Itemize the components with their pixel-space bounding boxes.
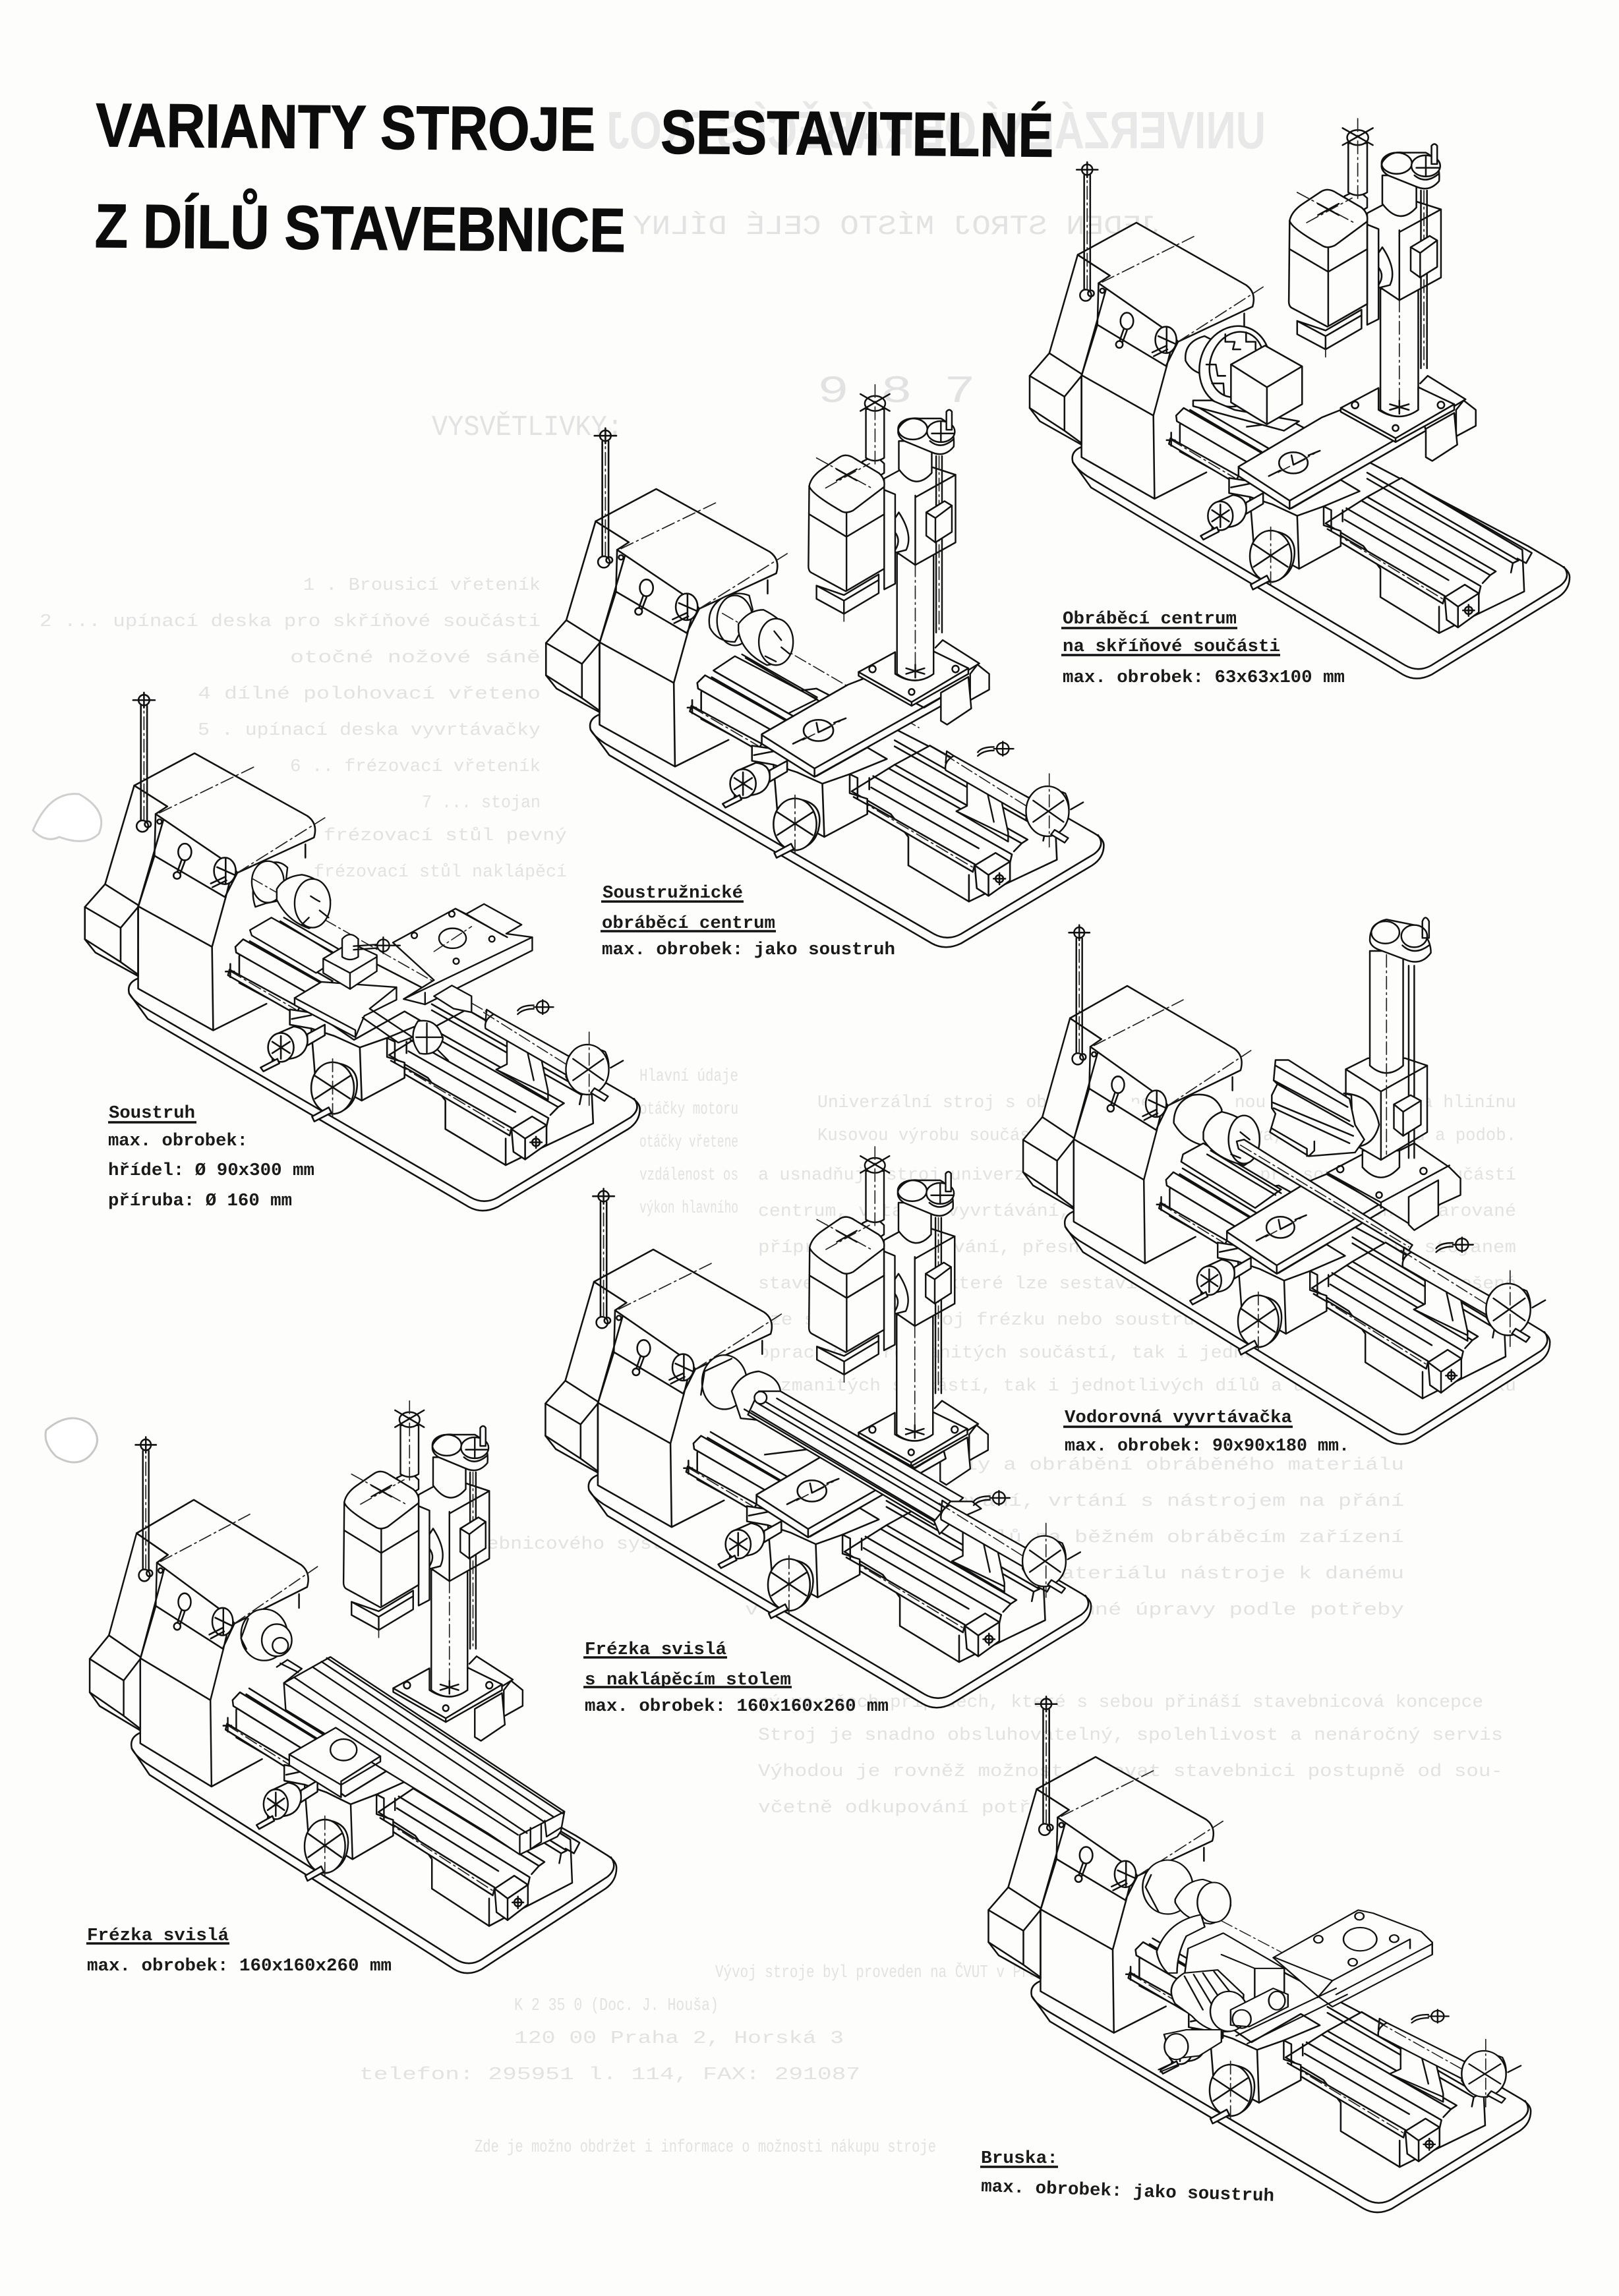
faint show-through text from the reverse page: Hlavní údaje <box>639 1067 738 1087</box>
label: Bruska <box>980 2149 1274 2207</box>
label: Frézka svislá s naklápěcím stolem: s naklápěcím stolem <box>585 1671 791 1690</box>
label: Soustruh: příruba: Ø 160 mm <box>108 1191 292 1211</box>
label: Vodorovná vyvrtávačka: Vodorovná vyvrtávačka <box>1065 1408 1292 1428</box>
machine: Soustružnické obráběcí centrum <box>546 385 1104 947</box>
title: SESTAVITELNÉ <box>661 97 1054 170</box>
faint show-through text from the reverse page: stavebnice dílů, které lze sestavit podle potřeby i kompletně řešené <box>758 1274 1516 1294</box>
faint show-through text from the reverse page: 1 . Brousicí vřeteník <box>303 576 541 596</box>
faint show-through text from the reverse page: K 2 35 0 (Doc. J. Houša) <box>514 1996 719 2016</box>
faint show-through text from the reverse page: 4 dílné polohovací vřeteno <box>198 685 541 704</box>
faint show-through text from the reverse page: Výhodou je rovněž možnost budovat stavebnici postupně od sou- <box>758 1762 1503 1782</box>
label: Obráběcí centrum: na skříňové součásti <box>1063 637 1280 657</box>
faint show-through text from the reverse page: všech důležitých dílů na běžném obráběcím zařízení <box>745 1528 1404 1548</box>
label: Frézka svislá s naklápěcím stolem: max. obrobek: 160x160x260 mm <box>585 1697 889 1717</box>
faint show-through text from the reverse page: 9 8 7 <box>817 371 976 414</box>
label: Bruska: max. obrobek: jako soustruh <box>981 2177 1274 2207</box>
faint show-through text from the reverse page: vzdálenost os <box>639 1166 738 1186</box>
faint show-through text from the reverse page: rozmanitých součástí, tak i jednotlivých dílů a univerzálních vrtáků <box>758 1376 1516 1396</box>
label: Obráběcí centrum <box>1061 610 1345 688</box>
machine: Frézka svislá <box>90 1401 616 1973</box>
faint show-through text from the reverse page: Stroj je snadno obsluhovatelný, spolehlivost a nenáročný servis <box>758 1726 1503 1746</box>
faint show-through text from the reverse page: přípravky, polohování, přesně tvarované dráhy stejně dílů stojanem <box>758 1238 1516 1258</box>
label: Soustružnické obráběcí centrum <box>601 884 895 960</box>
machine: Obráběcí centrum na skříňové součásti <box>1030 119 1570 679</box>
faint show-through text from the reverse page: otáčky vřetene <box>639 1133 738 1153</box>
label: Frézka svislá: max. obrobek: 160x160x260 mm <box>87 1957 392 1976</box>
faint show-through text from the reverse page: 2 ... upínací deska pro skříňové součásti <box>40 612 541 632</box>
faint show-through text from the reverse page: telefon: 295951 l. 114, FAX: 291087 <box>359 2065 860 2085</box>
label: Soustruh: max. obrobek: <box>108 1132 248 1151</box>
faint show-through text from the reverse page: 7 ... stojan <box>422 793 541 813</box>
title: VARIANTY STROJE <box>96 90 596 164</box>
machine: Frézka svislá s naklápěcím stolem <box>545 1147 1091 1708</box>
faint show-through text from the reverse page: ný ve všech případech, které s sebou přináší stavebnicová koncepce <box>758 1693 1483 1713</box>
faint show-through text from the reverse page: a usnadňuje stroj univerzální obráběcí centrum pro soustružení součástí <box>758 1166 1516 1186</box>
faint show-through text from the reverse page: součásti, materiály a obrábění obráběného materiálu <box>745 1456 1404 1476</box>
machine: Vodorovná vyvrtávačka <box>1023 917 1550 1444</box>
faint show-through text from the reverse page: Univerzální stroj s obrovanou nebo obdobnou součástí hovů a hlinínu <box>817 1093 1516 1113</box>
faint show-through text from the reverse page: lze sestavit stroj frézku nebo soustruh s přesnou stavebnicí a pro <box>758 1311 1516 1331</box>
title <box>94 90 1054 269</box>
faint show-through text from the reverse page: Kusovou výrobu součástí z kovů, plastů, dřeva, hovů, hlinínu a podob. <box>817 1126 1516 1146</box>
faint show-through text from the reverse page: výkon hlavního <box>639 1199 738 1219</box>
title: Z DÍLŮ STAVEBNICE <box>94 187 626 265</box>
label: Soustružnické obráběcí centrum: max. obrobek: jako soustruh <box>602 940 895 960</box>
label: Obráběcí centrum: max. obrobek: 63x63x100 mm <box>1063 668 1345 688</box>
machine: Bruska (grinder) <box>988 1696 1531 2212</box>
faint show-through text from the reverse page: otočné nožové sáně <box>290 648 541 668</box>
faint show-through text from the reverse page: 8 ... frézovací stůl pevný <box>250 826 567 846</box>
label: Frézka svislá s naklápěcím stolem <box>583 1640 889 1717</box>
label: Obráběcí centrum: Obráběcí centrum <box>1063 610 1237 629</box>
label: Soustružnické obráběcí centrum: Soustružnické <box>603 884 743 904</box>
label: Soustruh <box>108 1104 314 1211</box>
label: Frézka svislá: Frézka svislá <box>87 1926 229 1946</box>
faint show-through text from the reverse page: centrum, vrtání, vyvrtávání, frézování a polohování přesně tvarované <box>758 1202 1516 1222</box>
machine: Soustruh (lathe) <box>85 693 640 1211</box>
faint show-through text from the reverse page: velikost a přizpůsobit materiálu nástroje k danému <box>745 1564 1404 1584</box>
label: Frézka svislá s naklápěcím stolem: Frézka svislá <box>585 1640 726 1660</box>
faint show-through text from the reverse page: stejně jako frézování, vrtání s nástrojem na přání <box>745 1492 1404 1512</box>
punch hole: upper <box>33 794 102 841</box>
faint show-through text from the reverse page: včetně odkupování potřebných dílů. <box>758 1798 1180 1818</box>
faint show-through text from the reverse page: opracování rozmanitých součástí, tak i jednotlivých dílů a nástrojů <box>758 1343 1516 1363</box>
faint show-through text from the reverse page: Zde je možno obdržet i informace o možnosti nákupu stroje <box>475 2138 936 2158</box>
faint show-through text from the reverse page: 9 ... frézovací stůl naklápěcí <box>250 862 567 882</box>
faint show-through text from the reverse page: VYSVĚTLIVKY: <box>432 411 623 444</box>
faint show-through text from the reverse page: 6 .. frézovací vřeteník <box>290 757 541 777</box>
label: Soustruh: hřídel: Ø 90x300 mm <box>108 1161 314 1181</box>
label: Vodorovná vyvrtávačka <box>1063 1408 1349 1456</box>
faint show-through text from the reverse page: 120 00 Praha 2, Horská 3 <box>514 2029 844 2049</box>
faint show-through text from the reverse page: Třídy stavebnicového systému <box>369 1535 699 1555</box>
faint show-through text from the reverse page: v dané oblasti výrobní jemné úpravy podle potřeby <box>745 1601 1404 1621</box>
label: Vodorovná vyvrtávačka: max. obrobek: 90x90x180 mm. <box>1065 1437 1349 1456</box>
punch hole: lower <box>45 1418 98 1462</box>
faint show-through text from the reverse page: otáčky motoru <box>639 1100 738 1120</box>
label: Frézka svislá <box>86 1926 392 1976</box>
label: Soustruh: Soustruh <box>109 1104 195 1124</box>
label: Bruska: Bruska: <box>981 2149 1058 2169</box>
faint show-through text from the reverse page: JEDEN STROJ MÍSTO CELÉ DÍLNY <box>633 210 1160 243</box>
label: Soustružnické obráběcí centrum: obráběcí centrum <box>602 914 775 934</box>
faint show-through text from the reverse page: UNIVERZÁLNÍ OBRÁBĚCÍ STROJ <box>606 101 1266 159</box>
faint show-through text from the reverse page: Vývoj stroje byl proveden na ČVUT v Praze - fakulta strojní <box>715 1961 1203 1983</box>
faint show-through text from the reverse page: 5 . upínací deska vyvrtávačky <box>198 721 541 741</box>
